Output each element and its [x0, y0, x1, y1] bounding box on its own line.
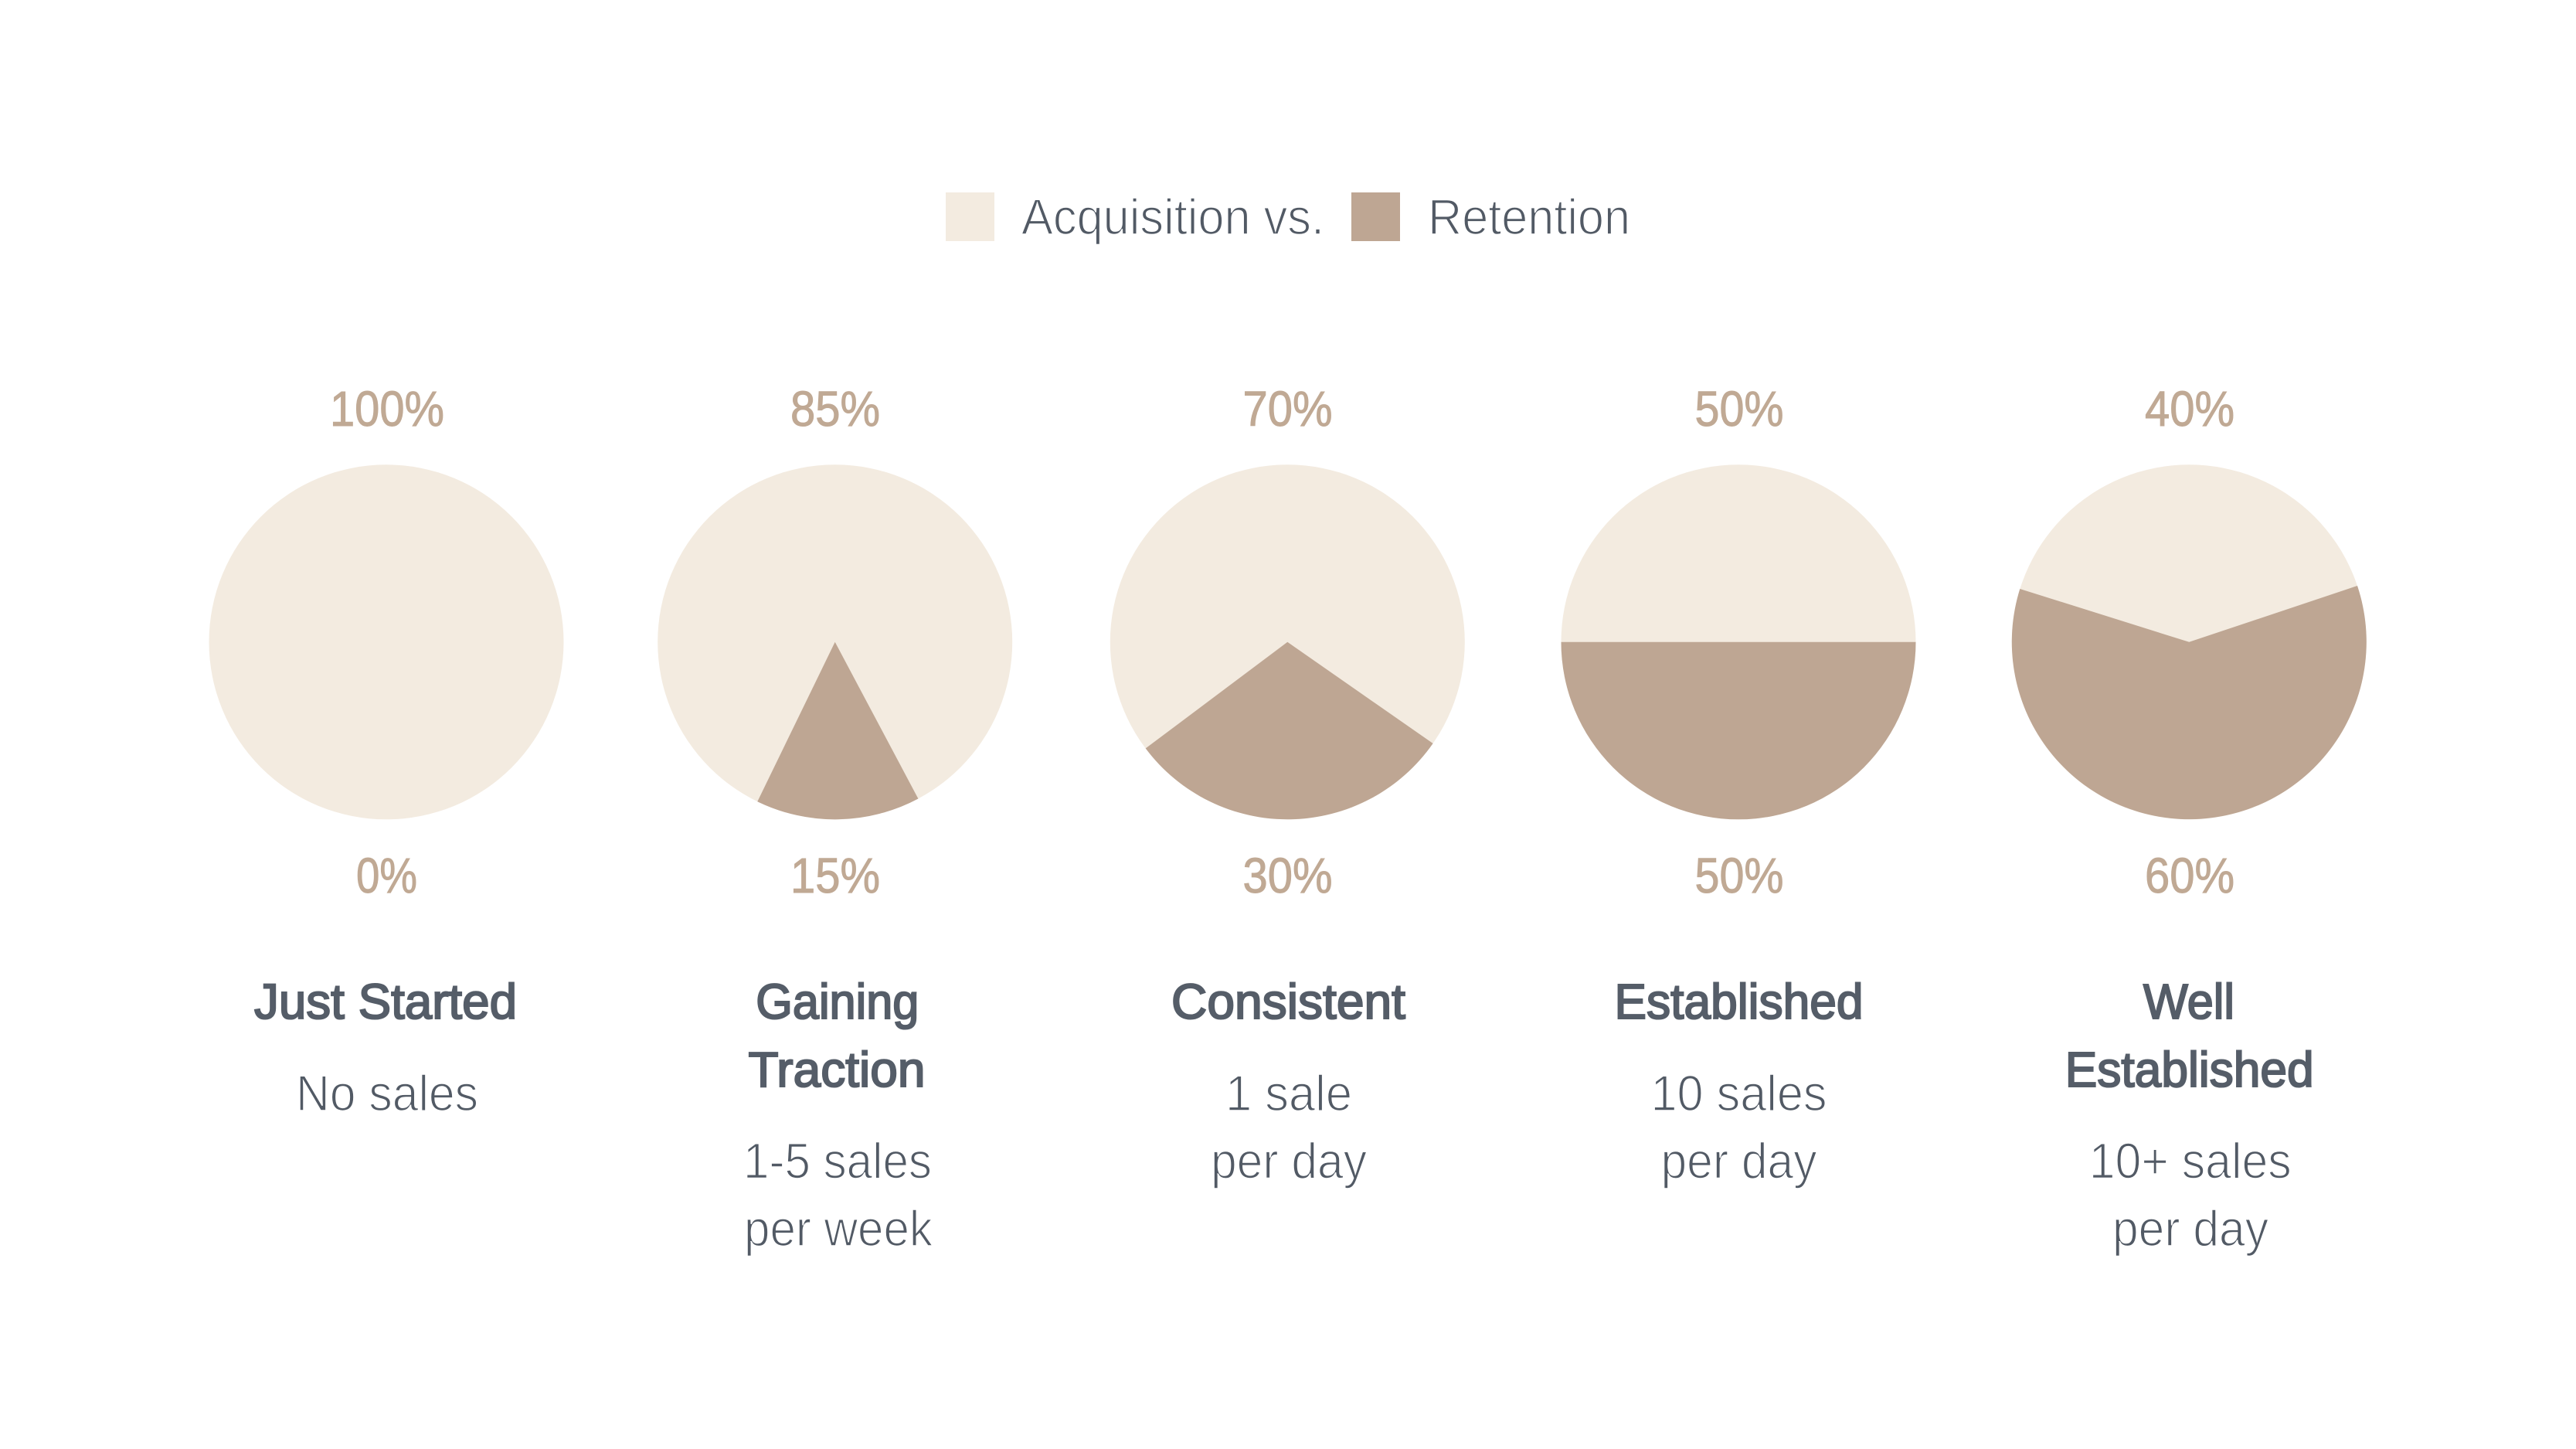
legend label: acquisition: Acquisition vs. [1021, 189, 1324, 245]
legend label: retention: Retention [1428, 189, 1630, 245]
legend swatch: retention [1351, 192, 1400, 241]
pie chart: 40 / 60 [2012, 464, 2367, 819]
stage sales: per week [744, 1200, 933, 1257]
stage sales: 1 sale [1225, 1065, 1352, 1121]
column: well established [2012, 381, 2367, 1257]
stage title [2065, 974, 2314, 1097]
legend [946, 189, 1630, 245]
stage sales [1211, 1065, 1367, 1189]
column: established [1561, 381, 1916, 1189]
stage title: Well [2143, 974, 2234, 1029]
pie chart: 85 / 15 [658, 464, 1012, 819]
column: consistent [1110, 381, 1465, 1189]
pie chart: 100 / 0 [209, 464, 564, 819]
retention percent: 0% [356, 848, 417, 903]
stage sales: per day [2112, 1200, 2268, 1257]
stage title: Established [2065, 1042, 2314, 1097]
stage sales [2089, 1133, 2292, 1257]
stage sales: per day [1211, 1133, 1367, 1189]
retention percent: 60% [2145, 848, 2234, 903]
acquisition percent: 50% [1695, 381, 1783, 437]
retention percent: 30% [1242, 848, 1332, 903]
acquisition percent: 85% [790, 381, 880, 437]
acquisition percent: 100% [330, 381, 444, 437]
retention percent: 15% [790, 848, 880, 903]
stage sales: 1-5 sales [743, 1133, 932, 1189]
stage title: Gaining [756, 974, 919, 1029]
column: gaining traction [658, 381, 1012, 1257]
stage title: Consistent [1171, 974, 1405, 1029]
acquisition percent: 40% [2145, 381, 2234, 437]
stage sales: 10 sales [1650, 1065, 1827, 1121]
stage sales [743, 1133, 933, 1257]
pie chart: 50 / 50 [1561, 464, 1916, 819]
stage title: Traction [748, 1042, 926, 1097]
legend swatch: acquisition [946, 192, 994, 241]
column: just started [209, 381, 564, 1121]
stage title: Established [1615, 974, 1864, 1029]
stage sales: No sales [296, 1065, 478, 1121]
acquisition percent: 70% [1242, 381, 1332, 437]
stage title [748, 974, 926, 1097]
stage sales [1650, 1065, 1827, 1189]
stage title: Just Started [254, 974, 517, 1029]
stage sales: per day [1661, 1133, 1817, 1189]
retention percent: 50% [1695, 848, 1783, 903]
stage sales: 10+ sales [2089, 1133, 2292, 1189]
pie chart: 70 / 30 [1110, 464, 1465, 819]
